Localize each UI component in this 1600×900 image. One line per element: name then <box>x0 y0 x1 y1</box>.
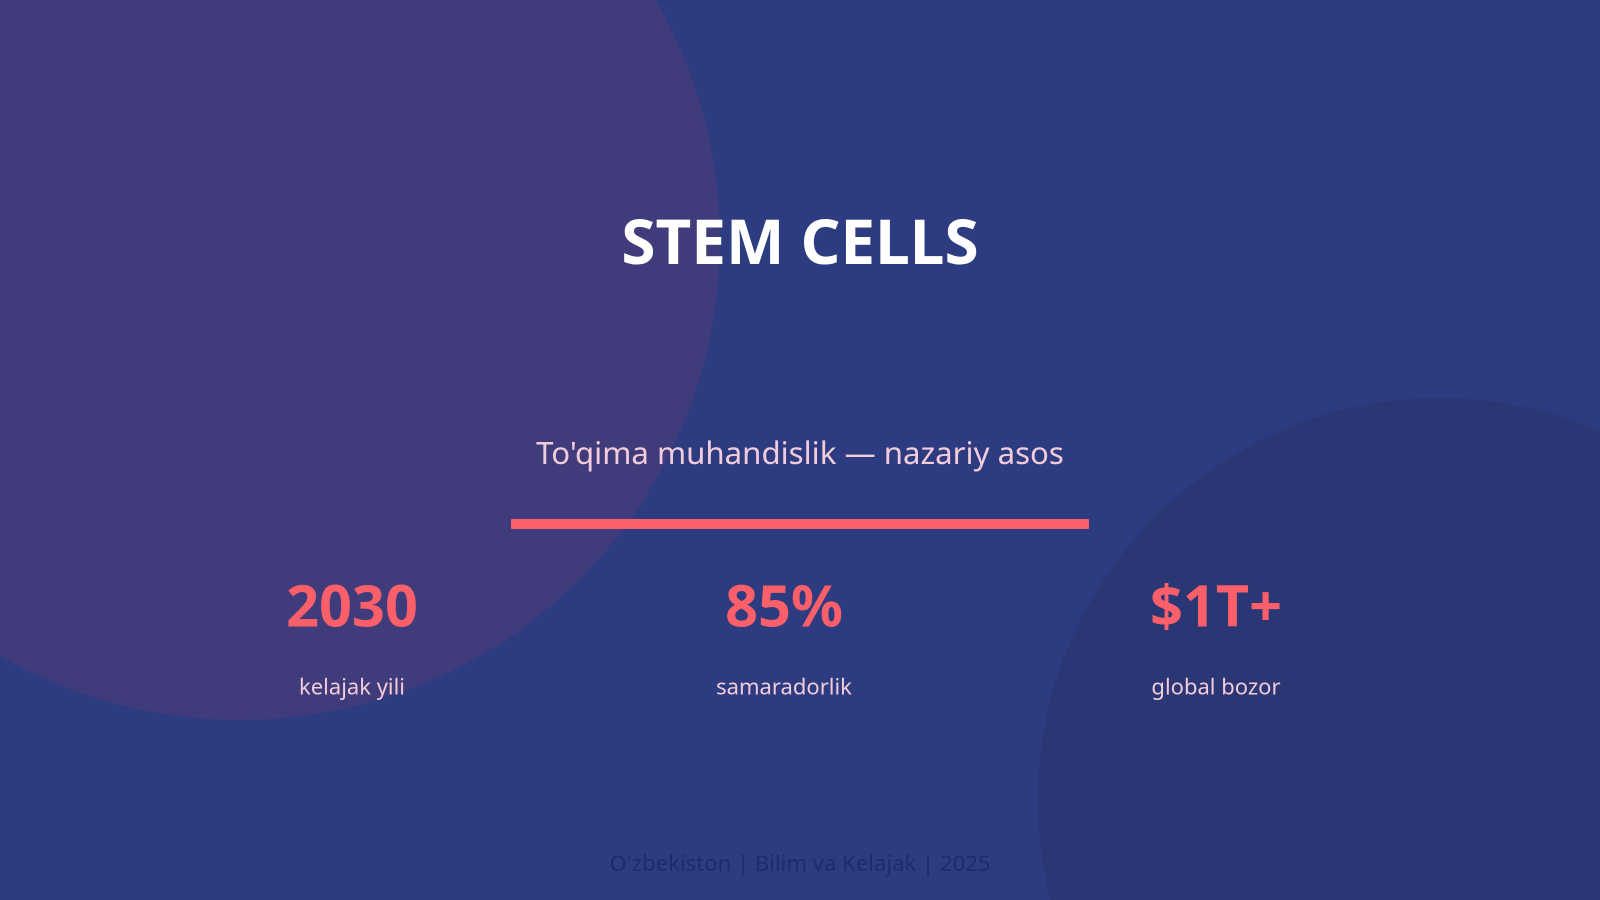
subtitle: To'qima muhandislik — nazariy asos <box>536 432 1064 474</box>
stat value: $1T+ <box>1150 564 1282 644</box>
stat value: 2030 <box>286 564 418 644</box>
title: STEM CELLS <box>621 199 979 283</box>
stat: 2030 <box>286 564 418 702</box>
decorative circle: top left <box>0 0 720 720</box>
stat value: 85% <box>725 564 843 644</box>
stat label: samaradorlik <box>716 672 852 702</box>
accent bar <box>511 519 1089 529</box>
footer: O'zbekiston | Bilim va Kelajak | 2025 <box>610 848 990 878</box>
stat label: kelajak yili <box>299 672 405 702</box>
decorative circle: bottom right <box>1038 398 1600 900</box>
stat: 85% <box>716 564 852 702</box>
stat label: global bozor <box>1151 672 1281 702</box>
stat: $1T+ <box>1150 564 1282 702</box>
